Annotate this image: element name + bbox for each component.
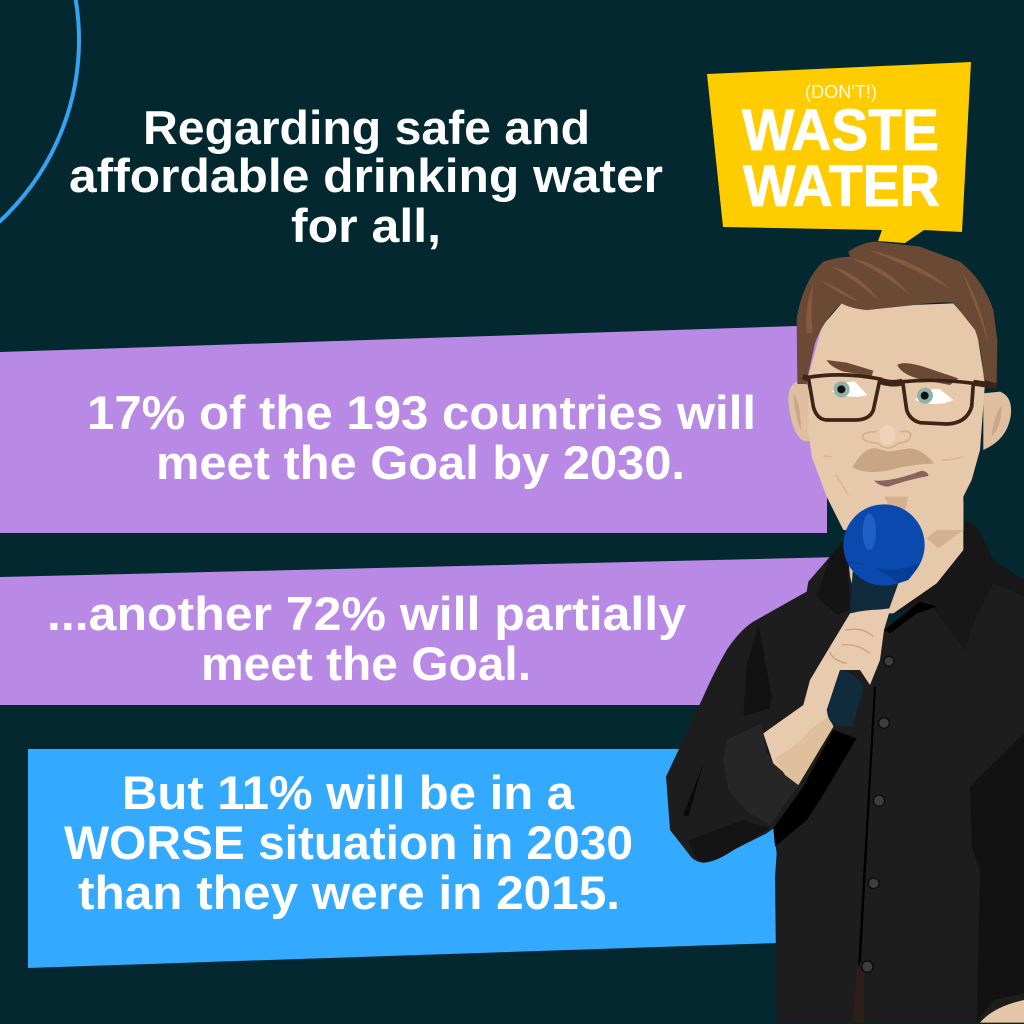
panel: 72 percent will partially meet the goal: ...another 72% will partially — [47, 587, 686, 640]
facial lines — [823, 456, 963, 495]
mouth — [874, 471, 928, 487]
speech bubble: don't waste water: (DON'T!) — [805, 82, 877, 102]
mic handle lower — [827, 670, 864, 727]
eyes — [832, 381, 953, 404]
mustache — [853, 448, 934, 472]
title — [69, 101, 663, 252]
shirt and arm — [666, 520, 1024, 1023]
decorative circle arc — [0, 0, 79, 287]
panel: 17 percent will meet the goal: 17% of the 193 countries will — [87, 386, 756, 439]
speech bubble: don't waste water: WATER — [743, 154, 940, 219]
glasses — [803, 375, 997, 424]
hair — [797, 242, 997, 384]
panel: 17 percent will meet the goal: meet the Goal by 2030. — [156, 436, 685, 489]
eyebrows — [827, 360, 958, 385]
microphone and hand — [763, 504, 925, 785]
panel: 11 percent will be worse: than they were in 2015. — [78, 866, 620, 919]
neck — [828, 500, 963, 613]
speech bubble: don't waste water: WASTE — [742, 98, 939, 163]
title: affordable drinking water — [69, 149, 663, 202]
ears — [788, 382, 1011, 450]
nose — [863, 425, 911, 448]
title: for all, — [291, 199, 441, 252]
mic handle upper — [850, 572, 898, 613]
face — [808, 303, 985, 530]
head — [788, 242, 1011, 530]
title: Regarding safe and — [143, 101, 590, 154]
hand — [763, 610, 890, 785]
panel: 17 percent will meet the goal — [0, 325, 827, 533]
panel: 72 percent will partially meet the goal — [0, 557, 840, 705]
presenter illustration — [666, 242, 1024, 1023]
mic head — [843, 504, 925, 586]
panel: 11 percent will be worse: WORSE situation in 2030 — [64, 816, 633, 869]
panel: 11 percent will be worse — [28, 749, 790, 968]
panel: 72 percent will partially meet the goal: meet the Goal. — [201, 637, 531, 690]
shirt buttons — [862, 656, 894, 972]
panel: 11 percent will be worse: But 11% will be in a — [122, 766, 575, 819]
speech bubble: don't waste water — [707, 62, 971, 243]
